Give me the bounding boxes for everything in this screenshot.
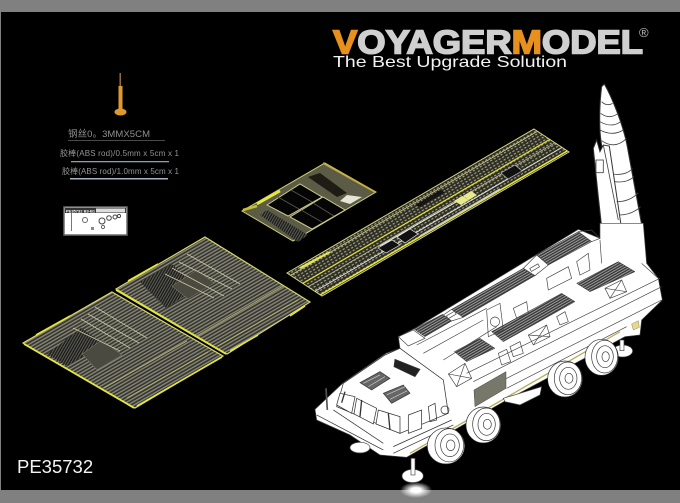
under-chassis part bbox=[503, 387, 542, 405]
small parts sheet thumbnail: PE35732 B3-B1 bbox=[66, 208, 96, 213]
photo-etch sheet: long strip bbox=[287, 129, 569, 296]
icon: brass rod with base bbox=[114, 73, 126, 116]
body panels and details bbox=[398, 230, 662, 388]
yellow hull strip bbox=[410, 332, 620, 453]
label: ABS rod 1.0mm bbox=[62, 166, 180, 180]
roof hatches bbox=[360, 372, 390, 390]
stabilizer pads bbox=[350, 340, 633, 483]
photo-etch sheet: small panel bbox=[242, 163, 376, 242]
vehicle: launcher truck bbox=[315, 84, 662, 483]
label: ABS rod 0.5mm: 胶棒(ABS rod)/0.5mm x 5cm x 1 bbox=[60, 148, 180, 158]
body silhouette bbox=[315, 223, 662, 457]
label: ABS rod 0.5mm bbox=[60, 148, 180, 162]
rocket and support bbox=[593, 84, 645, 253]
tagline: The Best Upgrade Solution bbox=[333, 54, 567, 71]
label: steel wire: 钢丝0。3MMX5CM bbox=[68, 128, 150, 140]
label: ABS rod 1.0mm: 胶棒(ABS rod)/1.0mm x 5cm x 1 bbox=[62, 166, 180, 176]
wheels bbox=[427, 339, 618, 464]
front antenna bbox=[326, 388, 327, 410]
cab bbox=[317, 348, 453, 453]
upper and lower grilles bbox=[414, 232, 635, 362]
logo: Voyager Model: ® bbox=[639, 25, 649, 40]
side storage doors bbox=[474, 372, 506, 407]
white glow on bottom band bbox=[400, 482, 432, 498]
logo: Voyager Model: VOYAGER MODEL bbox=[333, 24, 643, 60]
photo-etch sheet: upper large bbox=[116, 237, 310, 354]
product code: PE35732 bbox=[17, 456, 93, 477]
small parts sheet thumbnail bbox=[64, 207, 127, 235]
rear yellow part bbox=[632, 321, 639, 330]
photo-etch sheet: lower large bbox=[23, 292, 223, 408]
